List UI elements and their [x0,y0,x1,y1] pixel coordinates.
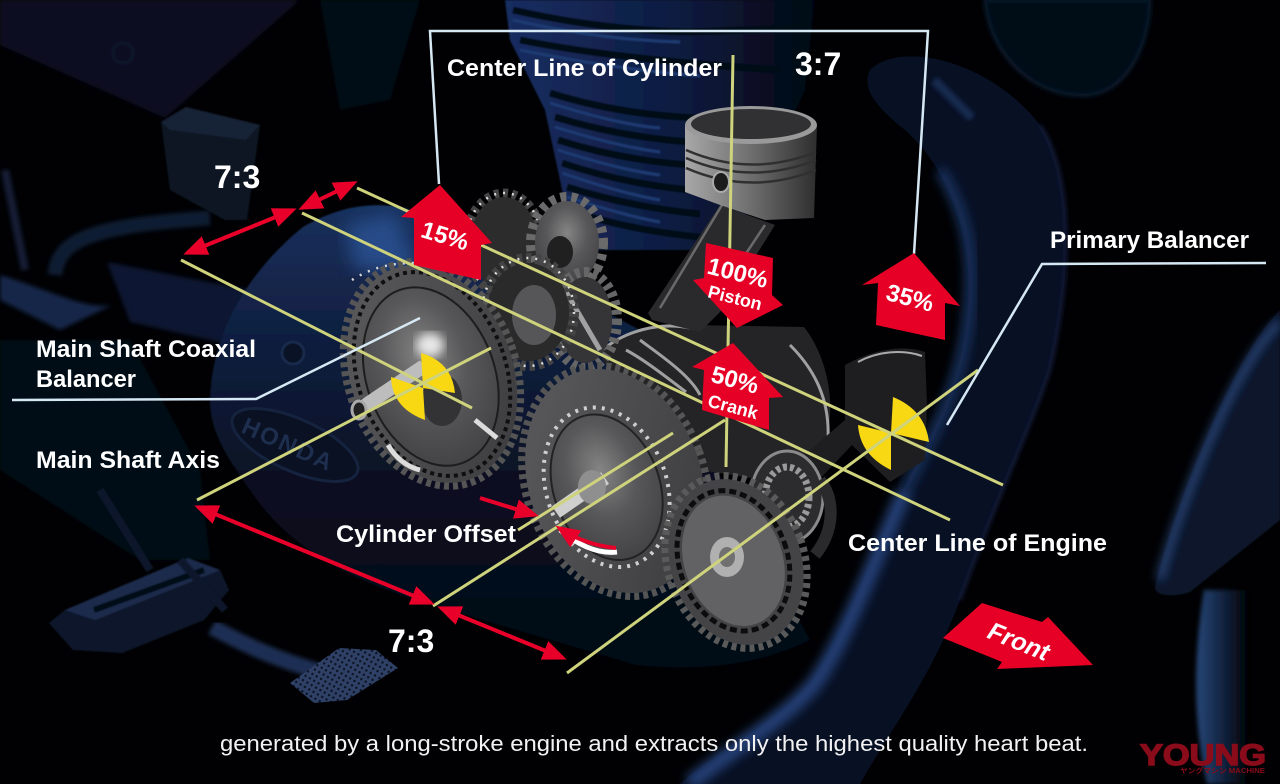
force arrow: 15% [401,185,492,280]
arrow: upper 7:3 long [187,210,293,253]
engine side cover [210,205,810,668]
pulley gear [751,451,831,555]
back gear 4 [482,258,574,366]
right fender shape [1155,310,1280,595]
label: primary balancer: Primary Balancer [1050,227,1249,254]
bracket line: 3:7 ratio [430,31,928,254]
leader line: main shaft coaxial balancer [12,318,420,400]
brake arm [212,627,320,672]
watermark logo: ヤングマシン MACHINE [1180,766,1265,775]
force arrow: 100% piston [693,243,783,328]
ratio arrows [187,183,616,658]
force arrow: 50% crank: Crank [706,391,761,424]
watermark logo: YOUNG [1140,739,1266,772]
front direction arrow [943,603,1093,669]
cover highlight [345,212,420,270]
footpeg [49,558,229,653]
back gear 2 [531,197,603,289]
force arrow: 100% piston: 100% [705,253,771,294]
balancer markers and axis lines [181,55,1003,673]
cover bolt [282,342,304,364]
right lower post [1196,590,1250,784]
crank highlights [600,326,828,440]
front direction arrow: Front [984,617,1055,667]
front gear hub [710,537,744,577]
label: top ratio 3:7: 3:7 [795,46,841,82]
arrow: lower 7:3 short [441,608,563,658]
label: main shaft coaxial balancer: Balancer [36,366,136,393]
cylinder fins [505,0,815,250]
caption subtitle: generated by a long-stroke engine and extracts only the highest quality heart beat. [220,731,1088,756]
brake reservoir [161,107,260,220]
left dark body shapes [0,0,420,560]
footpeg mount [100,490,225,610]
label: left ratio 7:3: 7:3 [214,159,260,195]
primary balancer mark [858,397,929,470]
cover logo badge [222,394,368,496]
label: center line of engine: Center Line of Engine [848,530,1107,557]
force arrow: 50% crank: 50% [708,361,762,400]
force arrow: 35%: 35% [883,279,937,318]
connecting rod [648,205,775,332]
crank disc [600,324,830,482]
force arrow: 15%: 15% [418,217,472,256]
label: main shaft axis: Main Shaft Axis [36,447,220,474]
front gear [642,456,830,668]
engine internals [314,106,927,668]
back gear 3 [553,272,617,368]
label: cylinder offset: Cylinder Offset [336,521,516,548]
arrow: lower 7:3 long [198,507,431,603]
force arrow: 50% crank [692,343,783,430]
label: bottom ratio 7:3: 7:3 [388,623,434,659]
middle gear [491,340,739,622]
arrow: cylinder offset left [480,498,535,515]
yellow axis lines [181,55,1003,673]
brake pedal [290,648,398,703]
force arrow: 35% [862,253,960,340]
main gear upper dotted rim [352,263,462,280]
back gear 1 [466,193,542,293]
leader line: primary balancer [947,263,1266,425]
force arrow: 100% piston: Piston [706,282,764,314]
middle gear hub [556,470,617,552]
cover logo badge: HONDA [238,413,338,477]
label: main shaft coaxial balancer [36,336,256,393]
piston [685,106,817,220]
balancer weight fan [775,348,927,500]
arrow: upper 7:3 short [302,183,354,208]
label: center line of cylinder: Center Line of Cylinder [447,55,722,82]
rod highlights [660,205,765,308]
arrow: cylinder offset right [559,528,616,548]
main frame tube [680,56,1066,784]
main shaft gear [314,237,550,511]
main shaft balancer mark [391,353,455,420]
main gear hub [352,333,497,470]
upper right tube [985,0,1150,95]
label: main shaft coaxial balancer: Main Shaft Coaxial [36,336,256,363]
balancer arc [858,352,922,362]
